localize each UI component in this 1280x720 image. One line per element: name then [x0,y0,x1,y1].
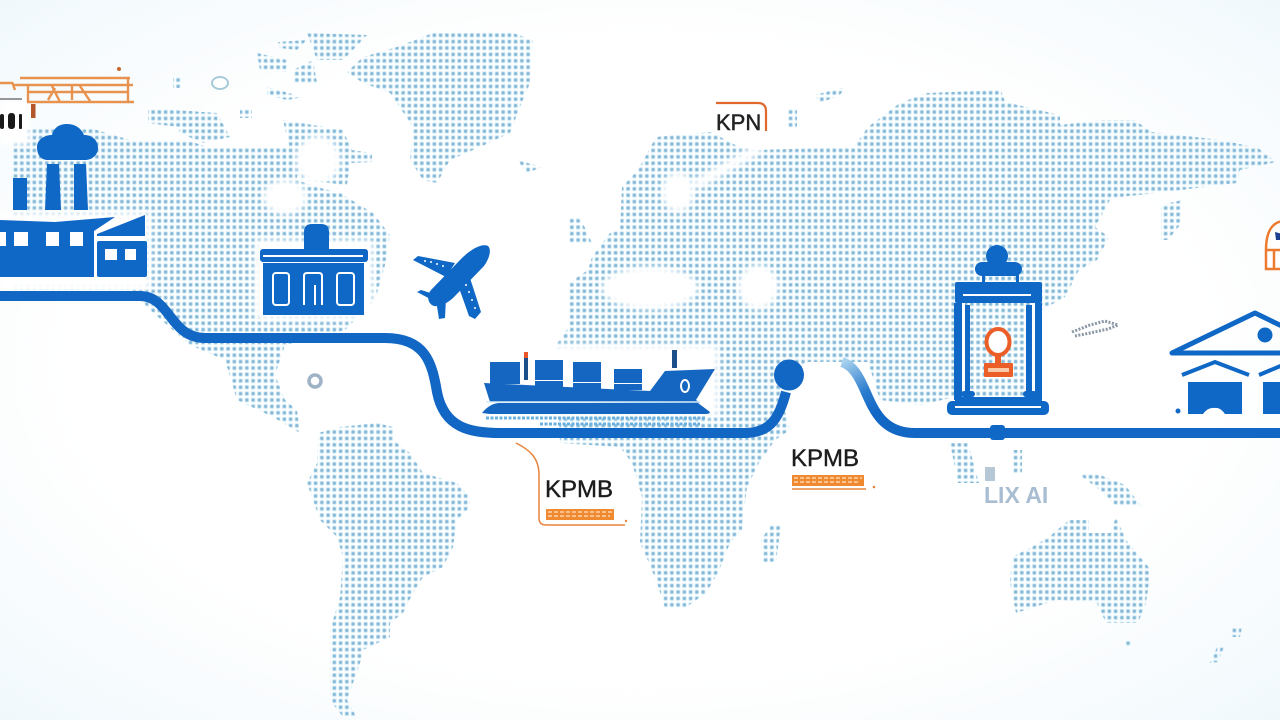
label: KPMB lower left callout [516,443,627,525]
icon: orange stamp [984,329,1013,377]
label: KPMB right: KPMB [791,445,859,472]
icon: customs gate [947,245,1049,415]
label: faded LIX AI: LIX AI [984,482,1048,508]
label: KPMB lower left callout: KPMB [545,476,613,503]
label: KPMB right [791,445,875,489]
icon: orange dome [1266,221,1280,269]
icon: container ship [482,350,715,424]
icon: warehouse [1172,313,1280,414]
route line [0,296,1280,433]
icon: warehouse building [260,224,368,315]
route node [774,360,804,390]
icon: factory [0,124,147,277]
icon: black windows [0,99,22,129]
route marker on customs line [990,425,1005,440]
islands sketch [1072,321,1118,336]
label: KPN: KPN [716,110,761,135]
icon: airplane [413,245,490,319]
orange scaffold sketch [0,67,134,118]
small ring north [212,77,228,89]
label: faded LIX AI [984,467,1048,508]
small map ring [309,375,321,387]
